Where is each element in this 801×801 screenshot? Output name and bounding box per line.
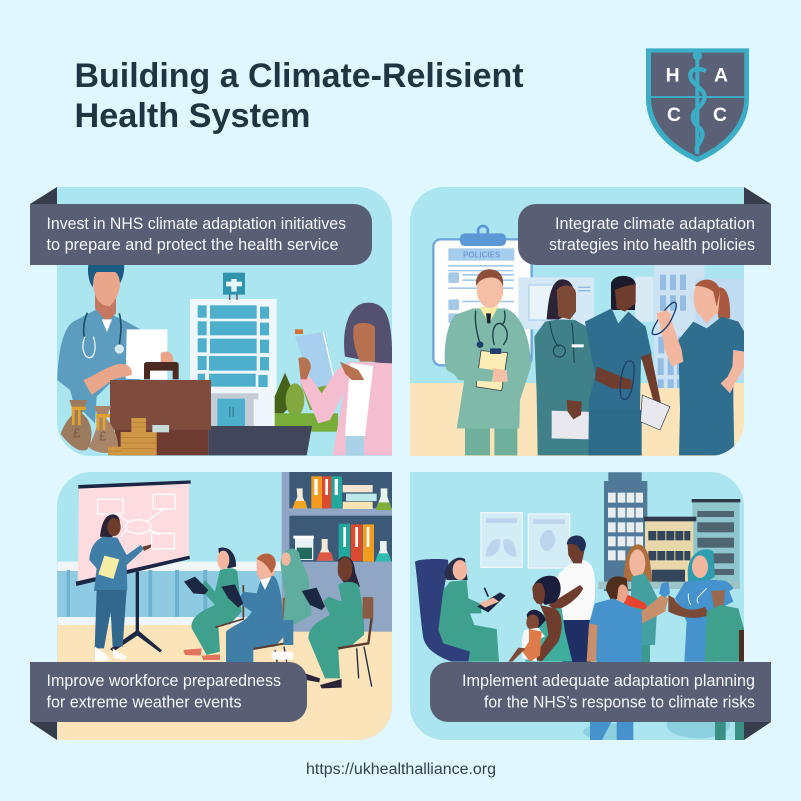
fold: dark ribbon corner: [744, 722, 771, 740]
icon: money bags and coins: £: [73, 425, 81, 440]
figure: nurse in teal scrubs: [534, 279, 595, 455]
illustration: doctor, briefcase, hospital and colleague: [57, 187, 392, 456]
icon: money bags and coins: [61, 400, 169, 455]
figure: clinician in armchair: [415, 558, 506, 662]
banner: workforce text: for extreme weather events: [46, 694, 242, 712]
illustration: presenter training seated staff: [57, 472, 394, 742]
figure: seated nurse one: [183, 547, 243, 660]
figure: male doctor: [57, 265, 173, 423]
illustration: clinicians with policies clipboard and city: [410, 187, 744, 456]
icon: briefcase: [110, 362, 211, 455]
banner: planning text: for the NHS’s response to climate risks: [484, 694, 755, 712]
logo: HACC shield: C: [667, 105, 681, 126]
banner: invest text: [30, 204, 372, 265]
banner: invest text: to prepare and protect the health service: [46, 236, 338, 254]
title: Building a Climate-Relisient: [74, 57, 524, 95]
banner: integrate text: strategies into health policies: [549, 236, 755, 254]
fold: dark ribbon corner: [30, 187, 57, 204]
logo: HACC shield: C: [713, 105, 727, 126]
figure: presenter: [89, 514, 151, 662]
title: [74, 57, 524, 135]
logo: HACC shield: [646, 48, 749, 162]
figure: long-haired nurse: [623, 544, 658, 663]
banner: planning text: Implement adequate adaptation planning: [462, 672, 755, 690]
figure: mother and child: [508, 576, 572, 662]
fold: dark ribbon corner: [744, 187, 771, 204]
banner: invest text: Invest in NHS climate adaptation initiatives: [46, 215, 346, 233]
shelves with binders and flasks: [282, 472, 393, 632]
figure: seated hijab nurse: [272, 549, 312, 660]
banner: integrate text: Integrate climate adaptation: [555, 215, 755, 233]
figure: nurse in blue scrubs: [585, 276, 670, 455]
panel: improve workforce preparedness: [30, 472, 394, 742]
icon: policies clipboard: [433, 226, 532, 365]
floor shadows and legs below banner: [583, 722, 744, 740]
banner: planning text: [430, 662, 771, 722]
banner: workforce text: Improve workforce preparedness: [46, 672, 281, 690]
title: Health System: [74, 97, 310, 135]
icon: money bags and coins: £: [99, 429, 107, 444]
illustration: clinic, families, staff and city: [410, 472, 744, 740]
logo: HACC shield: H: [666, 66, 680, 87]
figure: surgeon with cap: [705, 580, 744, 662]
figure: seated doctor: [221, 554, 288, 662]
projection screen: [76, 480, 191, 652]
figure: consultant in green coat: [445, 269, 531, 455]
logo: HACC shield: A: [714, 66, 728, 87]
panel: invest in NHS adaptation: [30, 187, 392, 456]
panel: implement adaptation planning: [410, 472, 771, 740]
figure: seated nurse two: [302, 556, 373, 688]
icon: policies clipboard: POLICIES: [463, 251, 501, 260]
figure: father: [548, 536, 595, 663]
fold: dark ribbon corner: [30, 722, 57, 740]
figure: man in blue shirt: [587, 576, 670, 662]
banner: workforce text: [30, 662, 307, 722]
background buildings: [598, 472, 740, 591]
anatomy posters: [481, 513, 570, 568]
figure: nurse in hijab: [668, 549, 733, 662]
figure: woman with clipboard: [295, 303, 392, 455]
banner: integrate text: [518, 204, 771, 265]
panel: integrate into health policies: [410, 187, 771, 456]
figure: nurse with ponytail: [652, 280, 744, 455]
source url: https://ukhealthalliance.org: [306, 761, 496, 778]
